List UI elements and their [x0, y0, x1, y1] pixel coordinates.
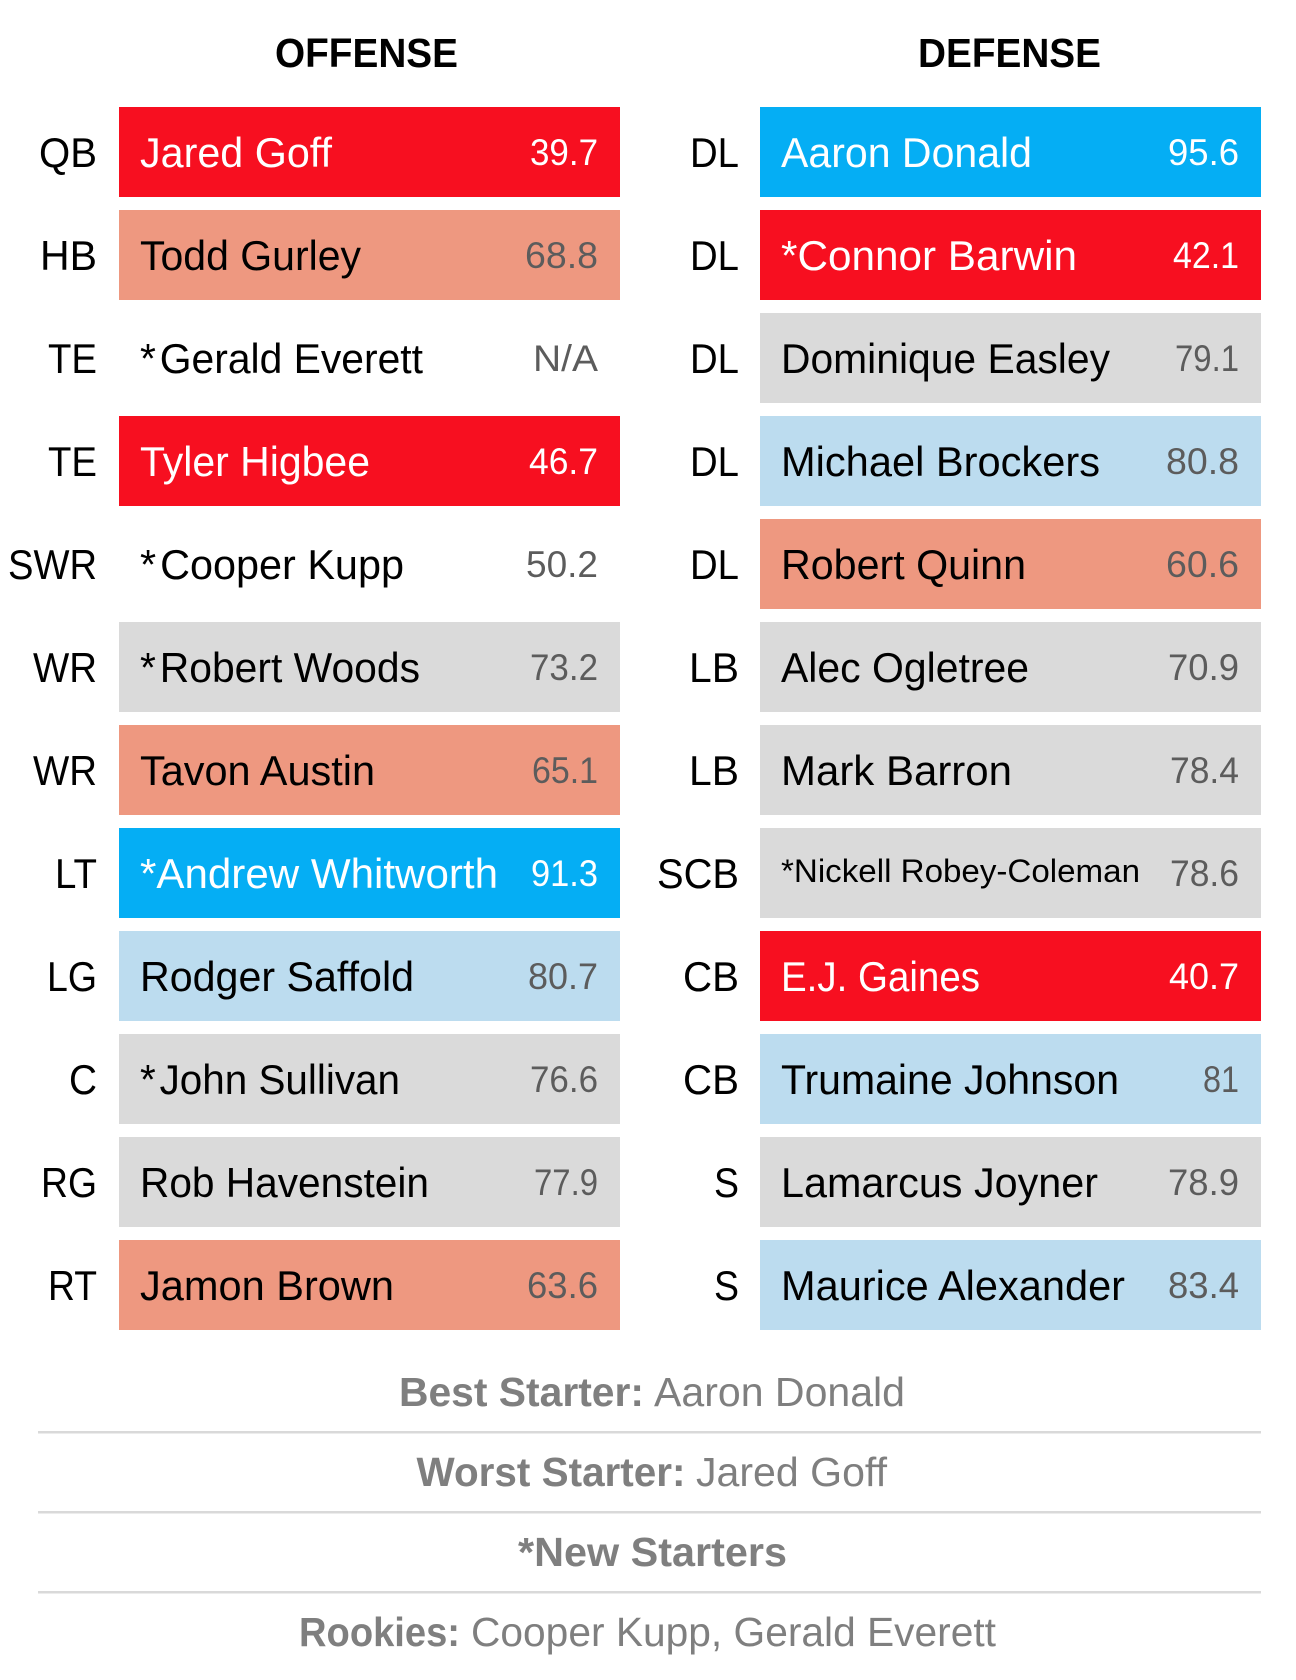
- row: SCB Nickell Robey-Coleman: *Nickell Robey-Coleman: [781, 853, 1140, 889]
- row: RG Rob Havenstein: RG: [41, 1159, 97, 1206]
- row: S Lamarcus Joyner: S: [714, 1159, 739, 1206]
- note: best starter: [399, 1369, 905, 1415]
- row: CB E.J. Gaines: 40.7: [1169, 956, 1239, 997]
- row: LB Mark Barron: Mark Barron: [781, 747, 1012, 794]
- row: DL Michael Brockers: [690, 416, 1261, 506]
- row: LT Andrew Whitworth: *Andrew Whitworth: [140, 850, 498, 897]
- row: SWR Cooper Kupp: SWR: [8, 541, 97, 588]
- note: best starter: Best Starter:: [399, 1369, 644, 1415]
- row: LB Mark Barron: LB: [689, 747, 739, 794]
- row: RG Rob Havenstein: Rob Havenstein: [140, 1159, 429, 1206]
- row: TE Tyler Higbee: Tyler Higbee: [140, 438, 370, 485]
- row: HB Todd Gurley: 68.8: [525, 235, 598, 276]
- row: SCB Nickell Robey-Coleman: 78.6: [1170, 853, 1239, 894]
- row: TE Tyler Higbee: 46.7: [529, 441, 598, 482]
- row: S Maurice Alexander: Maurice Alexander: [781, 1262, 1125, 1309]
- row: DL Aaron Donald: DL: [690, 129, 739, 176]
- row: LG Rodger Saffold: LG: [47, 953, 97, 1000]
- row: S Lamarcus Joyner: 78.9: [1168, 1162, 1239, 1203]
- row: S Lamarcus Joyner: Lamarcus Joyner: [781, 1159, 1098, 1206]
- row: SCB Nickell Robey-Coleman: [657, 828, 1261, 918]
- row: LT Andrew Whitworth: 91.3: [531, 853, 598, 894]
- row: WR Tavon Austin: WR: [33, 747, 97, 794]
- row: LB Alec Ogletree: LB: [689, 644, 739, 691]
- row: TE Tyler Higbee: [48, 416, 620, 506]
- note: rookies: Rookies:: [299, 1609, 460, 1655]
- row: DL Connor Barwin: 42.1: [1173, 235, 1239, 276]
- row: DL Connor Barwin: [690, 210, 1261, 300]
- row: DL Dominique Easley: 79.1: [1175, 338, 1239, 379]
- row: LG Rodger Saffold: 80.7: [528, 956, 598, 997]
- row: RG Rob Havenstein: 77.9: [534, 1162, 598, 1203]
- row: DL Connor Barwin: *Connor Barwin: [781, 232, 1077, 279]
- row: C John Sullivan: [69, 1034, 620, 1124]
- row: CB Trumaine Johnson: Trumaine Johnson: [781, 1056, 1119, 1103]
- row: WR Robert Woods: 73.2: [530, 647, 598, 688]
- row: DL Aaron Donald: [690, 107, 1261, 197]
- note: best starter: Aaron Donald: [654, 1369, 905, 1415]
- row: HB Todd Gurley: Todd Gurley: [140, 232, 361, 279]
- panel: defense roster: [657, 107, 1261, 1330]
- row: DL Robert Quinn: 60.6: [1166, 544, 1239, 585]
- row: WR Tavon Austin: [33, 725, 620, 815]
- row: LB Mark Barron: 78.4: [1170, 750, 1239, 791]
- row: WR Tavon Austin: Tavon Austin: [140, 747, 375, 794]
- row: DL Robert Quinn: [690, 519, 1261, 609]
- row: DL Aaron Donald: Aaron Donald: [781, 129, 1032, 176]
- row: HB Todd Gurley: HB: [40, 232, 97, 279]
- row: DL Robert Quinn: DL: [690, 541, 739, 588]
- row: DL Connor Barwin: DL: [690, 232, 739, 279]
- row: DL Michael Brockers: DL: [690, 438, 739, 485]
- row: S Lamarcus Joyner: [714, 1137, 1261, 1227]
- row: LB Alec Ogletree: [689, 622, 1261, 712]
- row: S Maurice Alexander: 83.4: [1168, 1265, 1239, 1306]
- row: SWR Cooper Kupp: [8, 541, 598, 588]
- row: SWR Cooper Kupp: *Cooper Kupp: [140, 541, 404, 588]
- row: CB Trumaine Johnson: 81: [1203, 1059, 1239, 1100]
- row: TE Gerald Everett: [48, 335, 598, 382]
- row: LT Andrew Whitworth: LT: [55, 850, 97, 897]
- row: DL Dominique Easley: DL: [690, 335, 739, 382]
- row: WR Robert Woods: WR: [33, 644, 97, 691]
- row: LG Rodger Saffold: Rodger Saffold: [140, 953, 414, 1000]
- row: DL Michael Brockers: Michael Brockers: [781, 438, 1100, 485]
- row: TE Tyler Higbee: TE: [48, 438, 97, 485]
- row: WR Robert Woods: *Robert Woods: [140, 644, 420, 691]
- row: DL Aaron Donald: 95.6: [1168, 132, 1239, 173]
- row: QB Jared Goff: QB: [39, 129, 97, 176]
- panel: offense roster: [8, 107, 620, 1330]
- row: QB Jared Goff: Jared Goff: [140, 129, 332, 176]
- row: RT Jamon Brown: RT: [48, 1262, 97, 1309]
- note: worst starter: Jared Goff: [696, 1449, 888, 1495]
- note: worst starter: Worst Starter:: [416, 1449, 686, 1495]
- row: S Maurice Alexander: S: [714, 1262, 739, 1309]
- row: CB Trumaine Johnson: [683, 1034, 1261, 1124]
- note: rookies: Cooper Kupp, Gerald Everett: [471, 1609, 997, 1655]
- row: DL Dominique Easley: [690, 313, 1261, 403]
- row: CB E.J. Gaines: [683, 931, 1261, 1021]
- row: TE Gerald Everett: N/A: [533, 338, 598, 379]
- row: LG Rodger Saffold: [47, 931, 620, 1021]
- row: SWR Cooper Kupp: 50.2: [526, 544, 598, 585]
- row: TE Gerald Everett: TE: [48, 335, 97, 382]
- row: HB Todd Gurley: [40, 210, 620, 300]
- row: RT Jamon Brown: [48, 1240, 620, 1330]
- row: CB E.J. Gaines: E.J. Gaines: [781, 953, 980, 1000]
- row: QB Jared Goff: [39, 107, 620, 197]
- row: DL Michael Brockers: 80.8: [1166, 441, 1239, 482]
- row: WR Robert Woods: [33, 622, 620, 712]
- heading: defense: DEFENSE: [918, 30, 1101, 76]
- row: C John Sullivan: *John Sullivan: [140, 1056, 400, 1103]
- row: LB Alec Ogletree: Alec Ogletree: [781, 644, 1029, 691]
- panel: summary notes: [38, 1369, 1261, 1655]
- row: C John Sullivan: 76.6: [530, 1059, 598, 1100]
- row: WR Tavon Austin: 65.1: [532, 750, 598, 791]
- row: QB Jared Goff: 39.7: [530, 132, 598, 173]
- heading: offense: OFFENSE: [275, 30, 458, 76]
- row: LT Andrew Whitworth: [55, 828, 620, 918]
- note: new starters: *New Starters: [518, 1529, 787, 1575]
- row: RT Jamon Brown: 63.6: [527, 1265, 598, 1306]
- row: LB Alec Ogletree: 70.9: [1168, 647, 1239, 688]
- note: worst starter: [416, 1449, 888, 1495]
- row: TE Gerald Everett: *Gerald Everett: [140, 335, 423, 382]
- row: RG Rob Havenstein: [41, 1137, 620, 1227]
- row: SCB Nickell Robey-Coleman: SCB: [657, 850, 739, 897]
- row: S Maurice Alexander: [714, 1240, 1261, 1330]
- row: CB Trumaine Johnson: CB: [683, 1056, 739, 1103]
- row: RT Jamon Brown: Jamon Brown: [140, 1262, 394, 1309]
- row: DL Dominique Easley: Dominique Easley: [781, 335, 1110, 382]
- row: LB Mark Barron: [689, 725, 1261, 815]
- row: DL Robert Quinn: Robert Quinn: [781, 541, 1026, 588]
- row: CB E.J. Gaines: CB: [683, 953, 739, 1000]
- row: C John Sullivan: C: [69, 1056, 97, 1103]
